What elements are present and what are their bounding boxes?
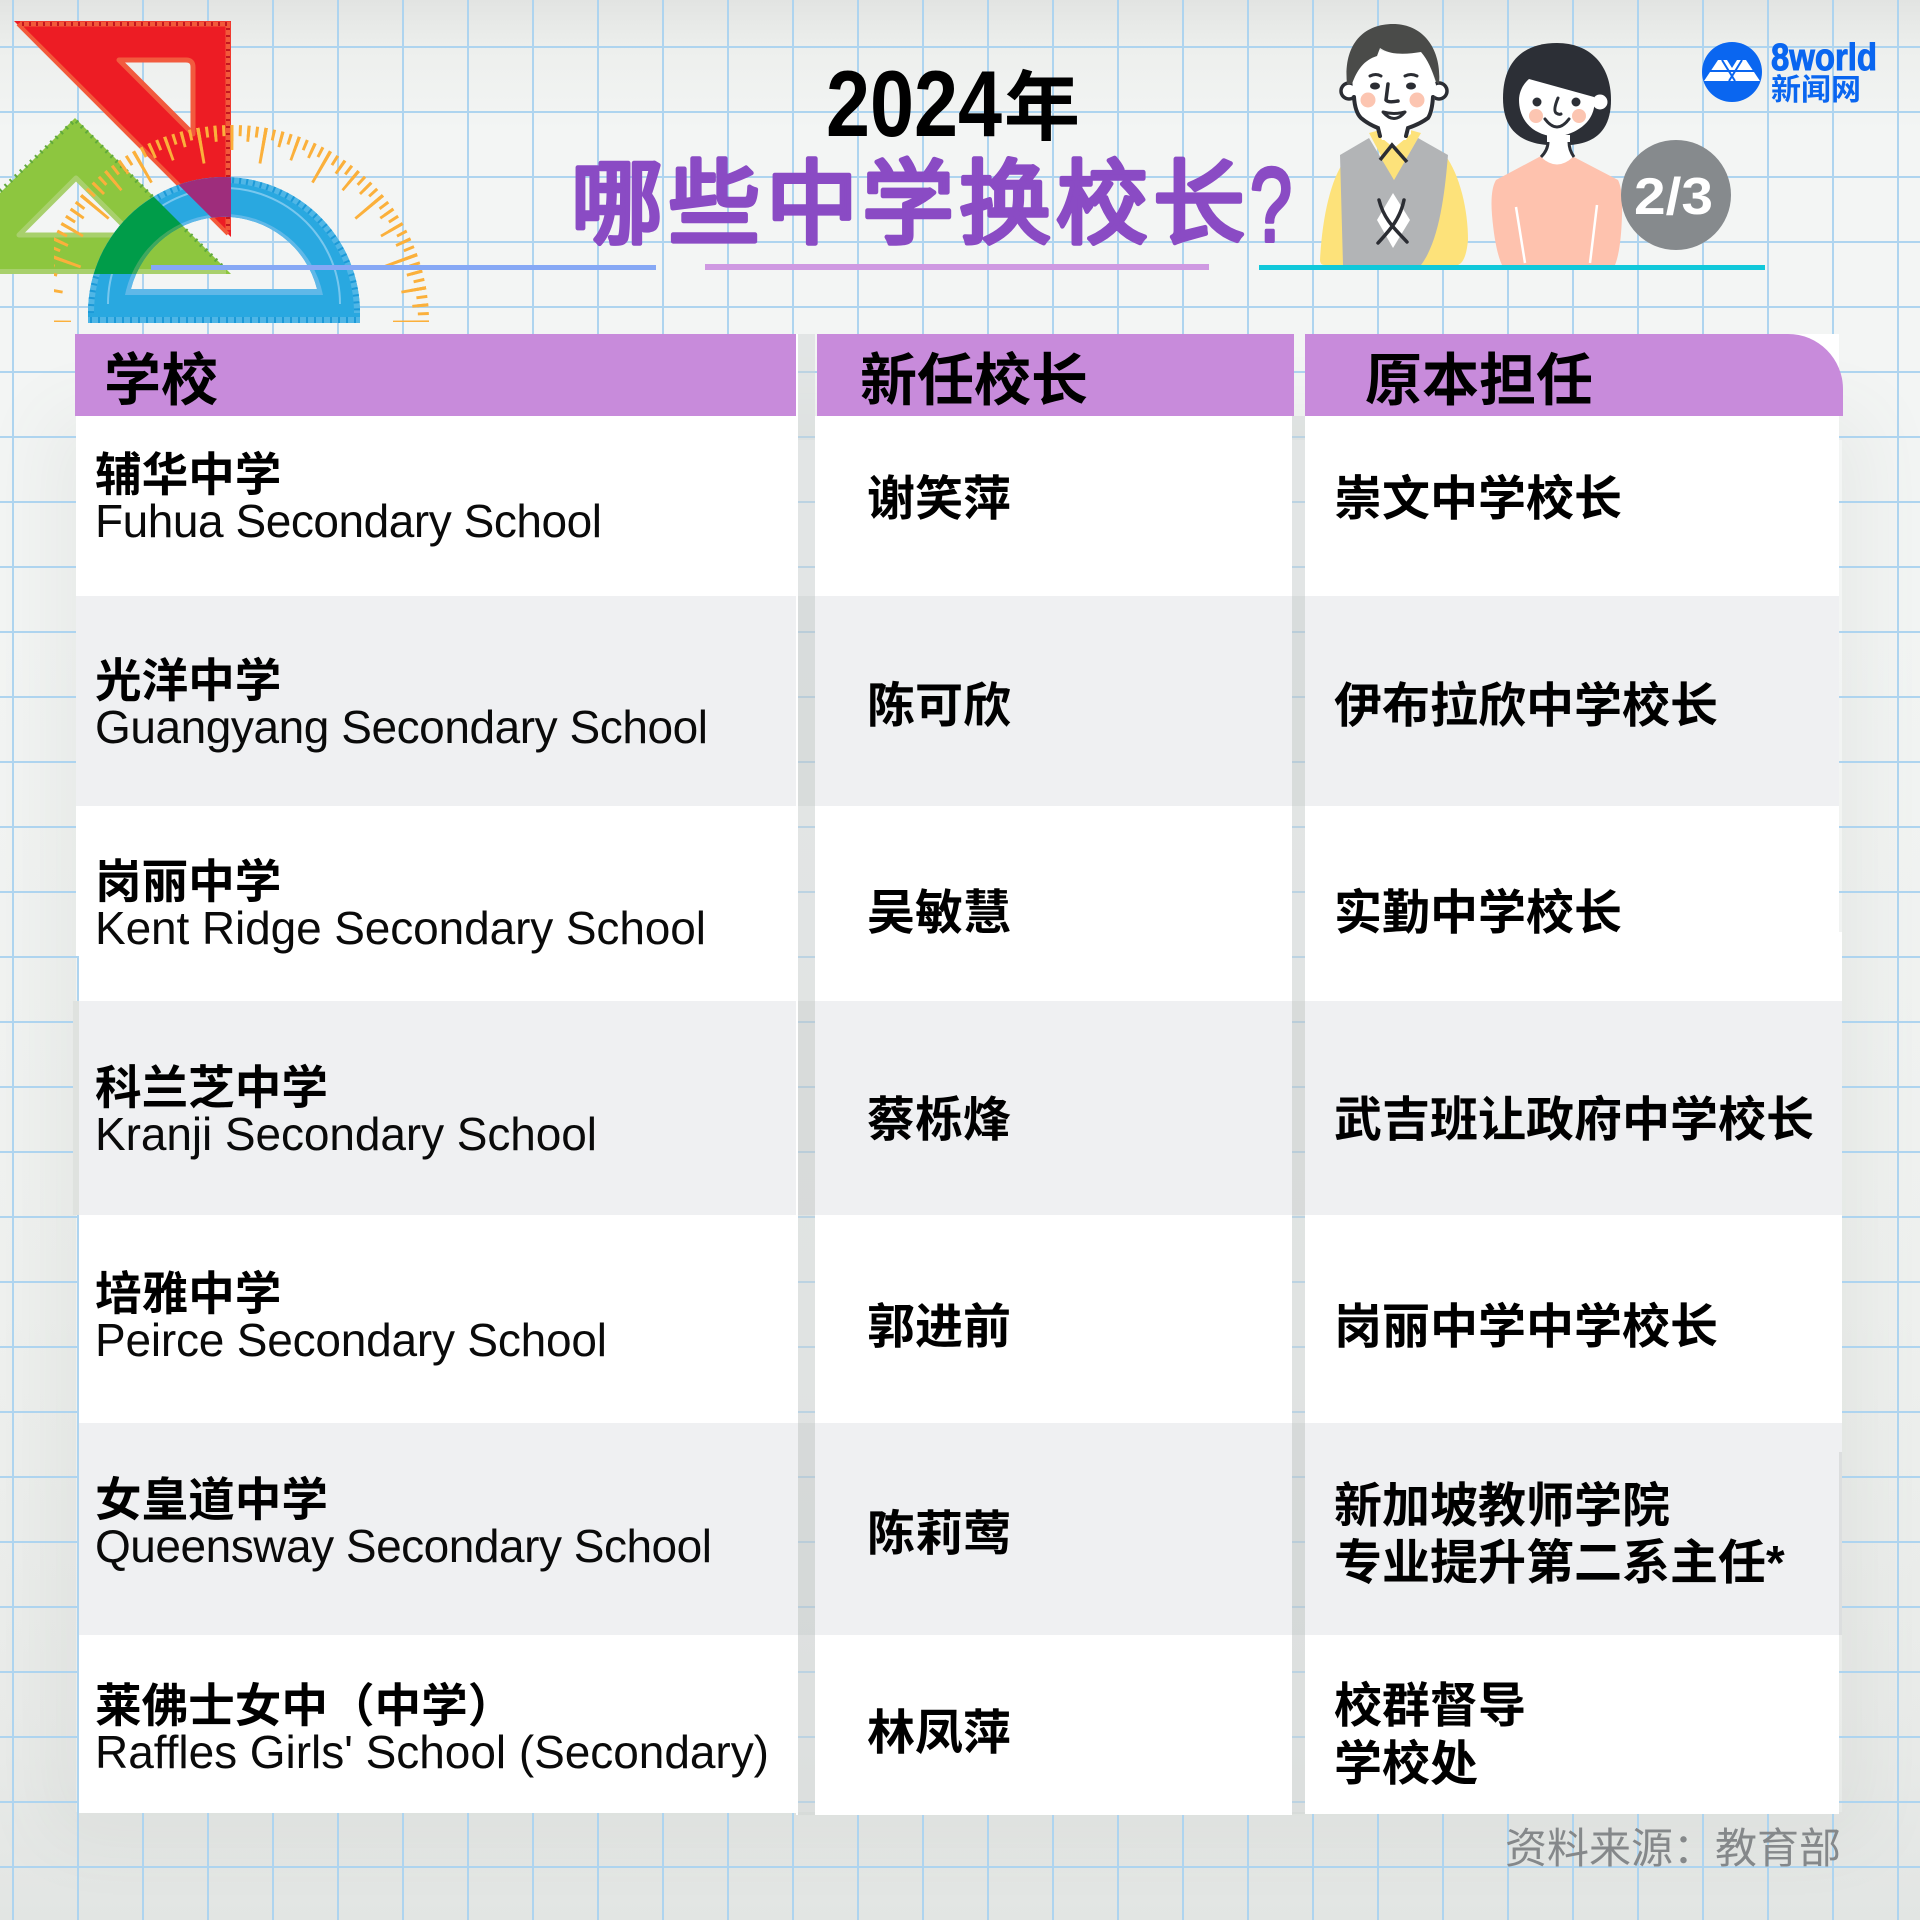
page badge 2/3: 2/3 [1634, 168, 1713, 226]
principal names: 陈莉莺 [867, 1508, 1011, 1561]
icon: green set square [0, 118, 231, 274]
school 5 [95, 1268, 607, 1366]
school 3 [95, 856, 706, 954]
school 1: Fuhua Secondary School [95, 495, 602, 547]
icon: blue protractor [88, 177, 360, 323]
title: which schools changed principals: 哪些中学换校长 [571, 154, 1245, 256]
header: previous position [1305, 334, 1843, 416]
school 6: Queensway Secondary School [95, 1520, 712, 1572]
school 4: Kranji Secondary School [95, 1108, 597, 1160]
previous positions: 伊布拉欣中学校长 [1334, 680, 1718, 733]
panel: new principal column [815, 334, 1294, 1815]
header: school: 学校 [104, 349, 218, 413]
previous positions: 校群督导 [1334, 1680, 1526, 1733]
school 2: 光洋中学 [95, 655, 281, 707]
previous positions: 学校处 [1334, 1738, 1478, 1791]
principal names: 谢笑萍 [867, 473, 1011, 526]
school 3: Kent Ridge Secondary School [95, 902, 706, 954]
previous positions: 武吉班让政府中学校长 [1334, 1094, 1814, 1147]
gutter between principal and previous-position columns [1292, 416, 1305, 1814]
previous positions: 专业提升第二系主任* [1334, 1537, 1785, 1590]
header: previous position: 原本担任 [1365, 349, 1593, 413]
school 1: 辅华中学 [95, 449, 281, 501]
principal names: 林凤萍 [867, 1707, 1011, 1760]
logo: 8world news: 8world [1771, 37, 1877, 79]
title: year: 年 [1004, 66, 1080, 151]
school 6 [95, 1474, 712, 1572]
icon: red set square [14, 21, 231, 237]
header: new principal [817, 334, 1294, 416]
previous positions [1334, 473, 1814, 1791]
illustration: male teacher [1320, 24, 1468, 265]
panel: school column [73, 334, 798, 1813]
table [73, 334, 1843, 1815]
source note: 资料来源：教育部 [1505, 1825, 1841, 1872]
icon: orange protractor tick arc [54, 125, 429, 322]
page badge 2/3 [1621, 140, 1731, 250]
previous positions: 新加坡教师学院 [1334, 1480, 1670, 1533]
principal names: 蔡栎烽 [867, 1094, 1011, 1147]
school 7: 莱佛士女中（中学） [95, 1680, 514, 1732]
logo: 8world news: 新闻网 [1771, 74, 1861, 107]
title underline: teal [1259, 265, 1765, 270]
header: new principal: 新任校长 [860, 349, 1088, 413]
principal names: 吴敏慧 [867, 887, 1011, 940]
school 5: Peirce Secondary School [95, 1314, 607, 1366]
title underline: blue [151, 265, 656, 270]
title: which schools changed principals: ? [1250, 147, 1292, 264]
illustration: female teacher [1492, 43, 1622, 265]
title: year: 2024 [826, 51, 1002, 156]
principal names: 郭进前 [867, 1301, 1011, 1354]
school 2: Guangyang Secondary School [95, 701, 708, 753]
school 2 [95, 655, 708, 753]
school 5: 培雅中学 [95, 1268, 281, 1320]
gutter between school and principal columns [796, 334, 815, 1815]
principal names: 陈可欣 [867, 680, 1011, 733]
school 1 [95, 449, 602, 547]
school 7: Raffles Girls' School (Secondary) [95, 1726, 769, 1778]
school 7 [95, 1680, 769, 1778]
school 6: 女皇道中学 [95, 1474, 328, 1526]
school 4: 科兰芝中学 [95, 1062, 328, 1114]
panel: previous position column [1305, 334, 1843, 1814]
logo: 8world news [1702, 37, 1877, 107]
previous positions: 实勤中学校长 [1334, 887, 1622, 940]
principal names [867, 473, 1011, 1760]
previous positions: 崇文中学校长 [1334, 473, 1622, 526]
school 4 [95, 1062, 597, 1160]
header: school [75, 334, 796, 416]
title underline: purple [705, 264, 1209, 270]
school 3: 岗丽中学 [95, 856, 281, 908]
previous positions: 岗丽中学中学校长 [1334, 1301, 1718, 1354]
